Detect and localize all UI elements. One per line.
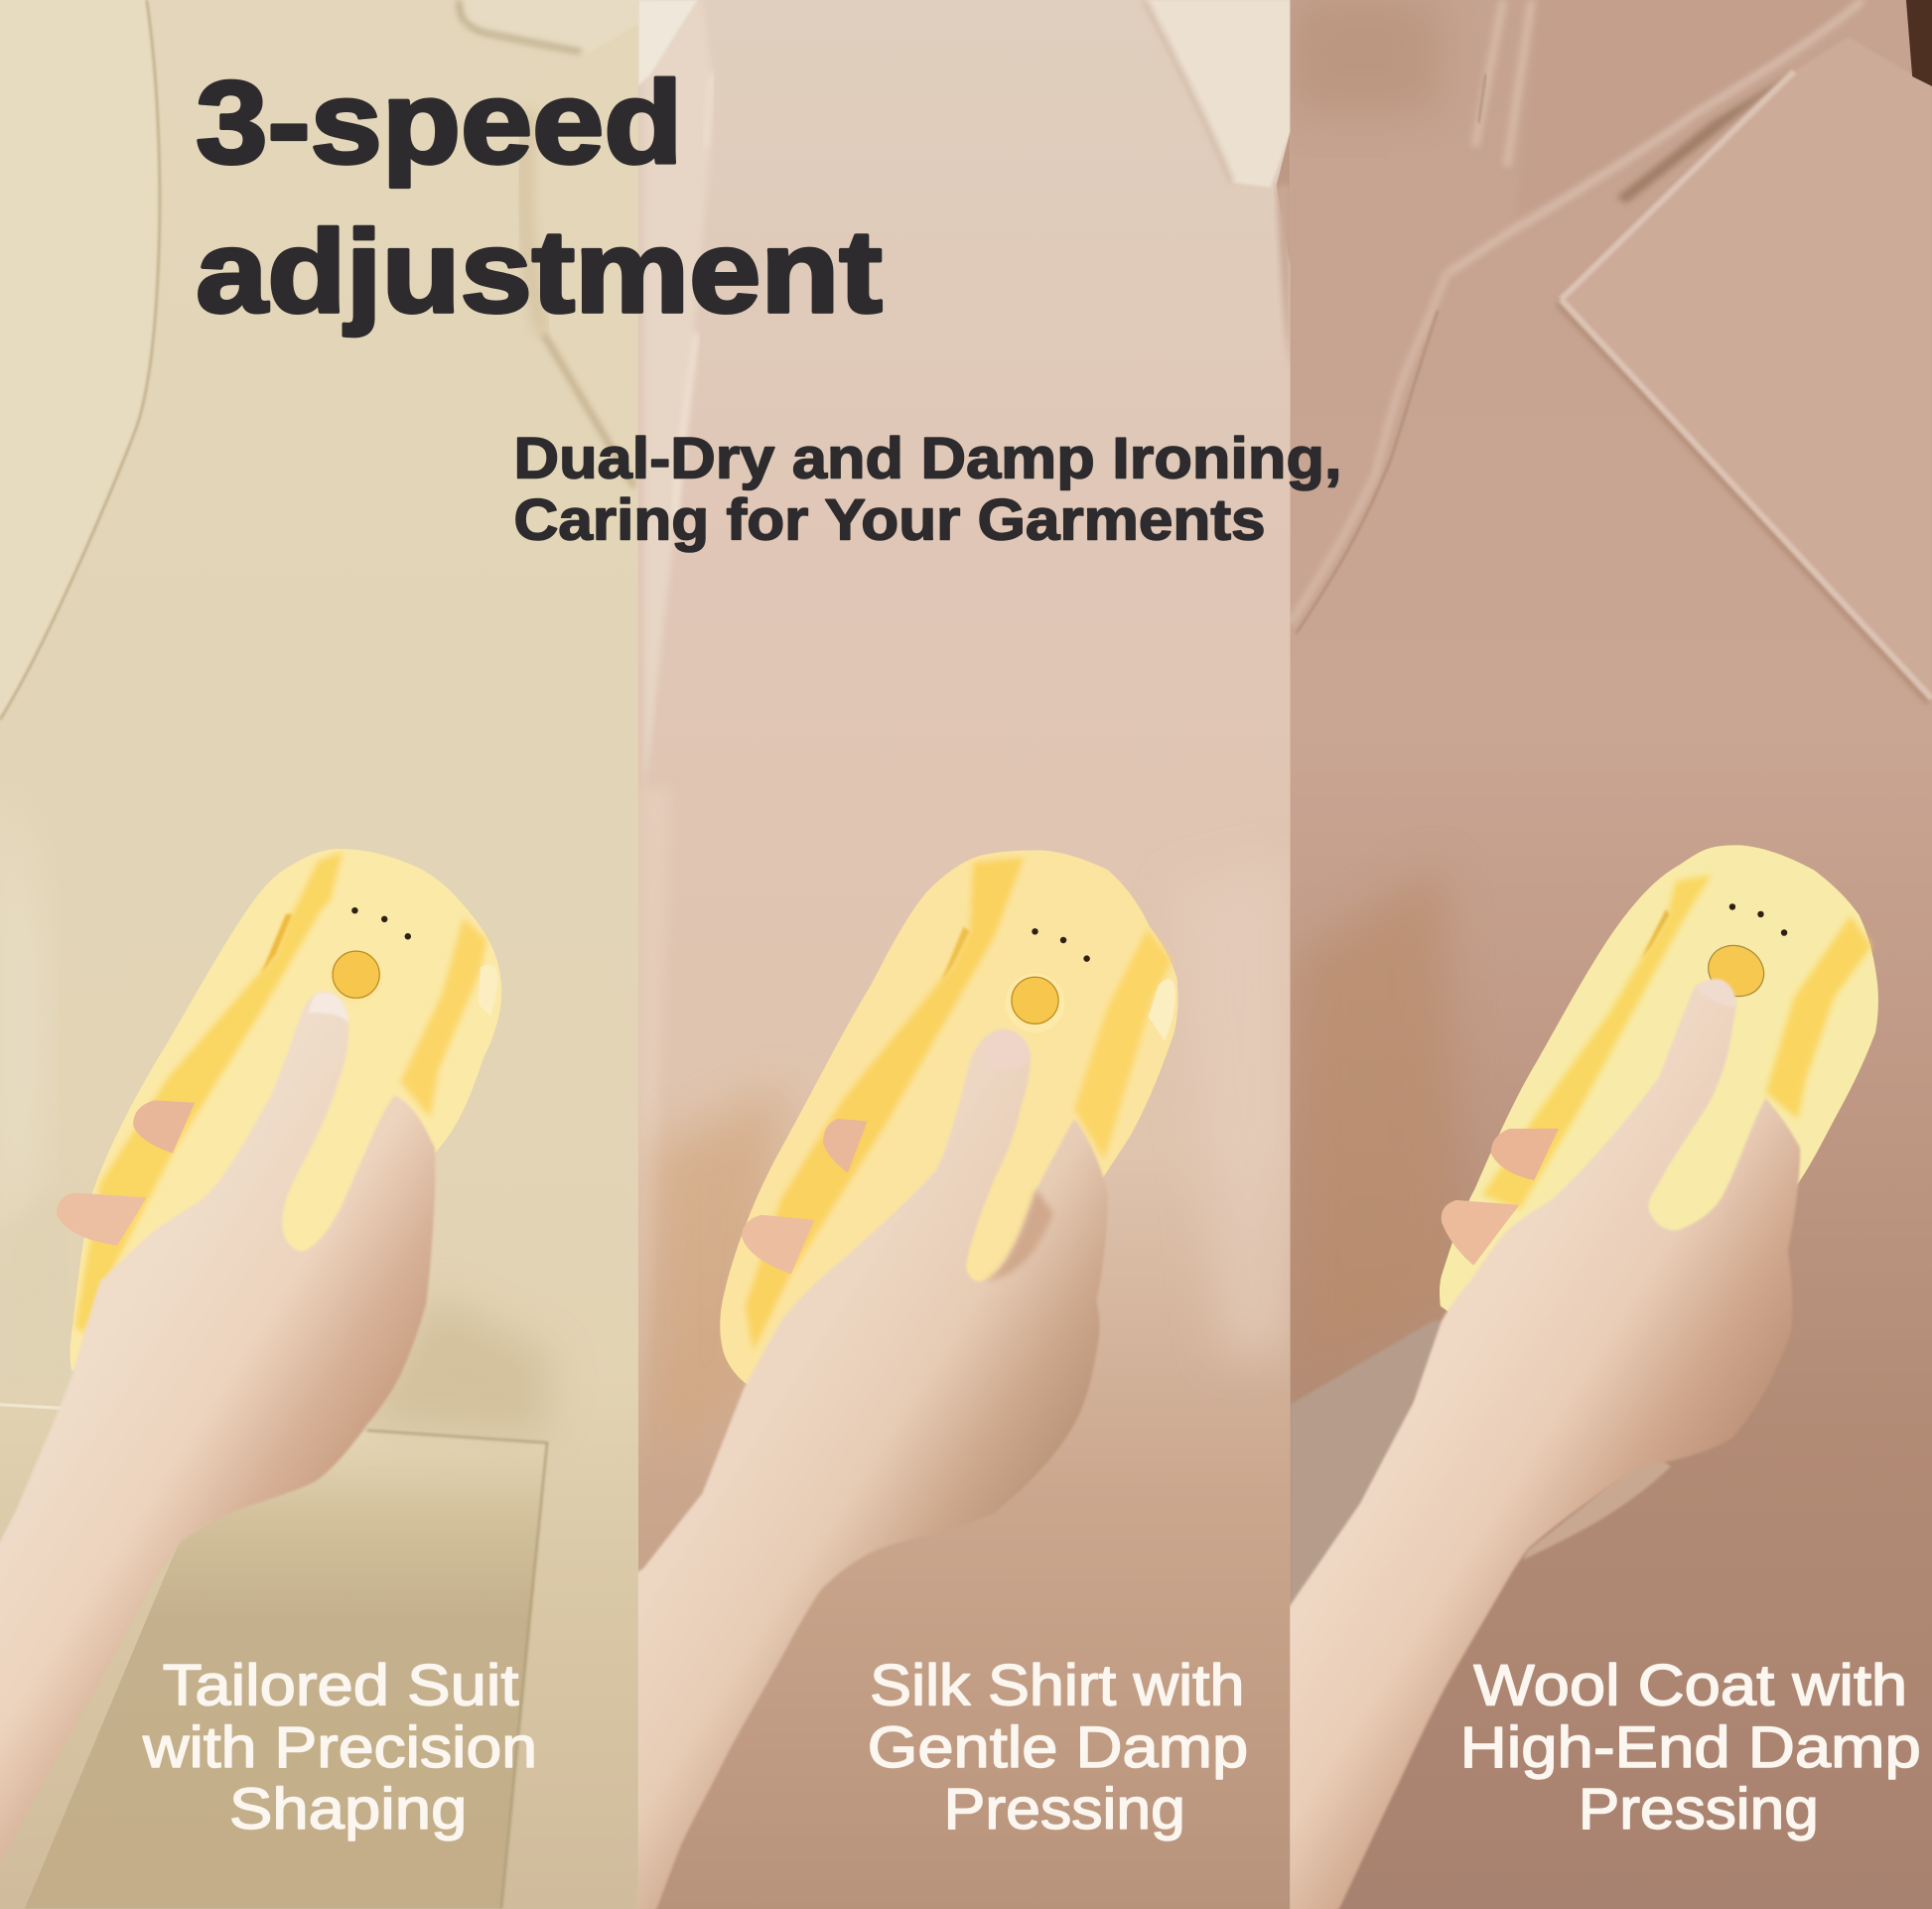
hand <box>0 992 435 1909</box>
iron yellow channel <box>1482 875 1712 1210</box>
shirt fold shading <box>653 1084 788 1466</box>
speed dots <box>351 907 411 939</box>
coat lapel right <box>1632 40 1930 238</box>
caption: tailored suit: Shaping <box>229 1777 467 1841</box>
finger lower <box>742 1215 814 1274</box>
suit collar <box>465 0 637 52</box>
panel: tailored suit <box>0 0 638 1909</box>
caption: tailored suit: Tailored Suit <box>163 1654 518 1718</box>
iron body <box>1440 845 1878 1324</box>
caption: silk shirt <box>868 1654 1248 1841</box>
finger upper <box>823 1119 868 1173</box>
hand with iron: shirt <box>638 850 1177 1909</box>
speed dots <box>1032 928 1090 962</box>
caption: wool coat: High-End Damp <box>1460 1715 1921 1780</box>
hand with iron: suit <box>0 849 501 1909</box>
fingernail <box>1696 980 1736 1007</box>
caption: wool coat: Wool Coat with <box>1473 1654 1907 1718</box>
subtitle <box>514 427 1342 553</box>
caption: tailored suit: with Precision <box>142 1715 537 1780</box>
iron yellow channel <box>75 852 343 1334</box>
caption: tailored suit <box>142 1654 537 1841</box>
speed button <box>1700 936 1772 1006</box>
hand <box>1171 980 1800 1909</box>
panel: wool coat <box>1290 0 1932 1909</box>
dark corner <box>1906 0 1932 86</box>
title <box>196 57 883 337</box>
shadow between fingers <box>980 1189 1053 1282</box>
iron right channel <box>1765 915 1871 1119</box>
finger upper <box>133 1100 195 1154</box>
fingernail <box>308 992 348 1023</box>
iron right channel <box>1074 929 1172 1159</box>
coat side shading <box>1291 875 1459 1350</box>
shirt collar <box>1145 0 1290 188</box>
speed button <box>1006 973 1064 1032</box>
subtitle: Caring for Your Garments <box>514 488 1266 553</box>
caption: silk shirt: Pressing <box>944 1777 1185 1841</box>
hand with iron: coat <box>1171 845 1878 1909</box>
finger lower <box>1442 1200 1519 1266</box>
speed button <box>329 950 383 1005</box>
caption: silk shirt: Silk Shirt with <box>870 1654 1244 1718</box>
coat collar <box>1516 0 1863 218</box>
title: adjustment <box>196 205 883 337</box>
speed dots <box>1729 903 1787 936</box>
caption: wool coat: Pressing <box>1579 1777 1819 1841</box>
shirt placket <box>644 66 707 759</box>
sleeve under wrist <box>1523 1454 1671 1560</box>
panel: silk shirt <box>638 0 1290 1909</box>
iron body <box>720 850 1178 1417</box>
hand <box>469 1029 1108 1909</box>
subtitle: Dual-Dry and Damp Ironing, <box>514 427 1342 491</box>
iron right channel <box>400 918 486 1118</box>
title: 3-speed <box>196 57 683 188</box>
iron yellow channel <box>746 858 1024 1352</box>
suit lapel <box>0 434 131 715</box>
coat lower lapel <box>1290 1320 1448 1608</box>
caption: wool coat <box>1460 1654 1921 1841</box>
suit pocket <box>25 1493 540 1908</box>
fingernail <box>985 1029 1031 1070</box>
caption: silk shirt: Gentle Damp <box>868 1715 1248 1780</box>
coat seam <box>1475 0 1532 167</box>
finger lower <box>57 1192 147 1246</box>
iron body <box>70 849 501 1386</box>
finger upper <box>1491 1129 1559 1180</box>
